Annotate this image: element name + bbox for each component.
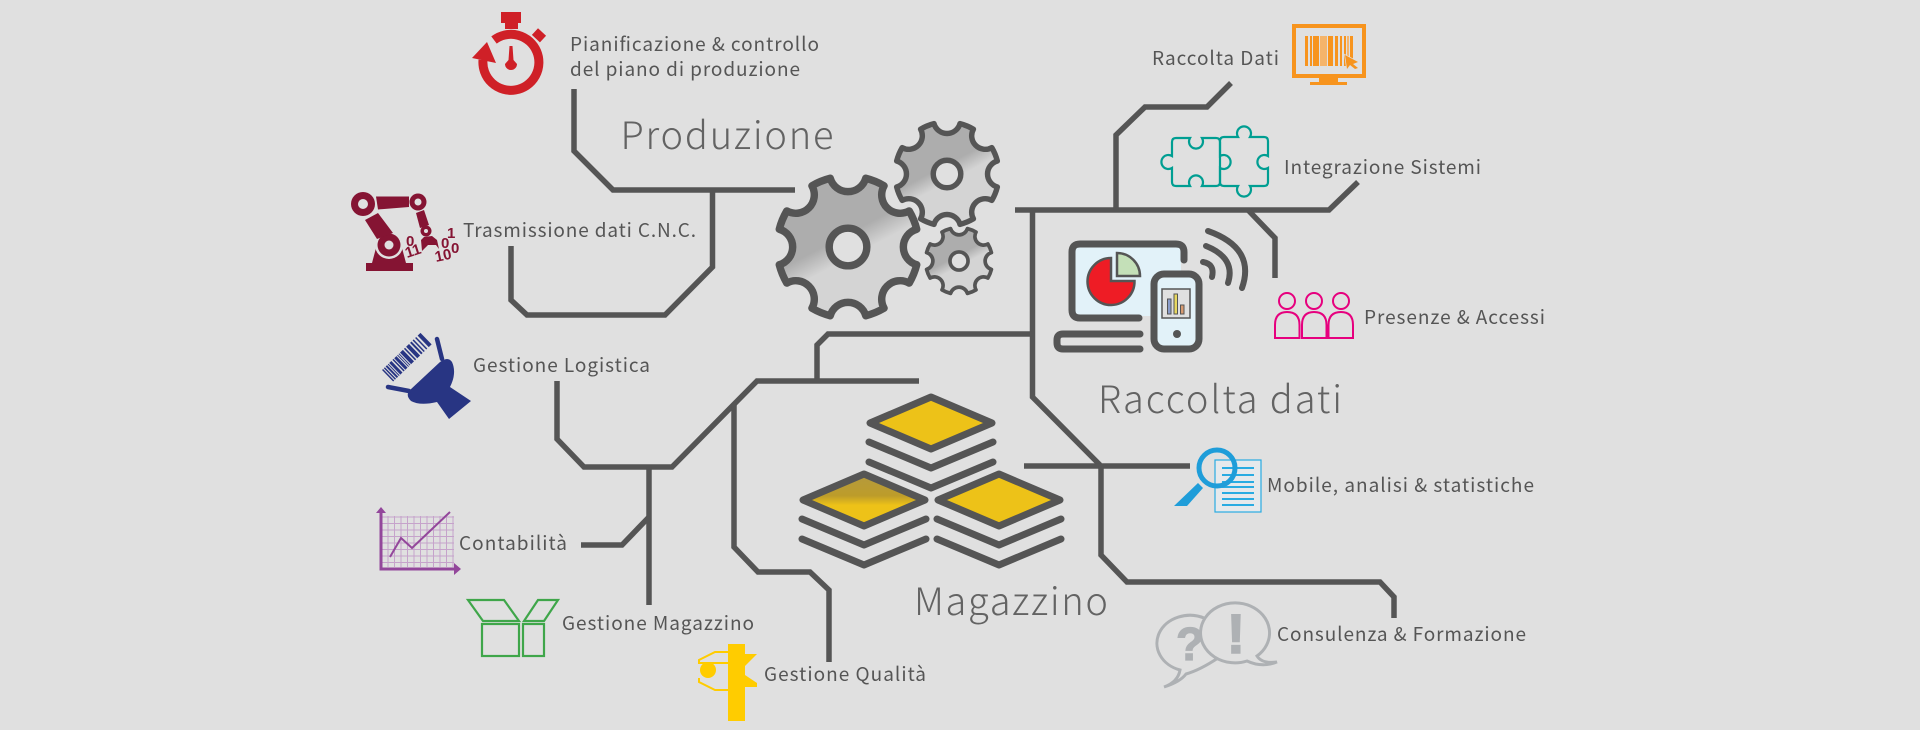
icon: robot arm [351,192,459,271]
icon: small gear [927,229,991,293]
robot data digits: 0 [451,240,459,257]
label: gestione logistica: Gestione Logistica [473,351,650,378]
label: consulenza e formazione: Consulenza & Formazione [1277,620,1526,647]
icon: stopwatch [472,12,546,90]
title: Raccolta dati: Raccolta dati [1098,369,1342,424]
label: piano di produzione: del piano di produzione [570,55,800,82]
icon: speech bubbles: ? [1176,618,1204,670]
label: gestione qualita: Gestione Qualità [764,660,926,687]
title: Magazzino: Magazzino [914,571,1108,626]
scanned barcode [382,333,432,382]
icon: open box [468,600,558,656]
icon: magnifier and document [1174,450,1261,512]
label: trasmissione dati: Trasmissione dati C.N.C. [463,216,696,243]
pie chart [1088,253,1140,305]
icon: large gear [779,178,917,316]
label: integrazione sistemi: Integrazione Sistemi [1284,153,1481,180]
robot data digits: 0 [406,233,414,250]
robot data digits: 1 [447,225,455,242]
icon: people [1275,293,1353,338]
right stack [937,474,1061,565]
robot data digits: 11 [403,241,423,262]
label: raccolta dati: Raccolta Dati [1152,44,1279,71]
phone [1154,274,1199,349]
cursor [1345,55,1358,69]
icon: barcode monitor [1294,26,1364,85]
icon: speech bubbles [1157,602,1277,687]
title: Produzione: Produzione [620,105,834,160]
connector lines: raccolta dati [817,83,1394,618]
label: presenze e accessi: Presenze & Accessi [1364,303,1545,330]
icon: growth chart [376,507,461,575]
robot data digits: 0 [441,235,449,252]
icon: puzzle [1161,126,1268,197]
left stack [802,474,926,565]
icon: barcode scanner [382,333,471,419]
label: contabilita: Contabilità [459,529,567,556]
icon: caliper [699,644,757,721]
wifi waves [1203,231,1245,288]
robot data digits [403,225,459,266]
icon: warehouse stacks [802,397,1061,565]
label: gestione magazzino: Gestione Magazzino [562,609,754,636]
icon: laptop and phone [1057,231,1245,349]
icon: speech bubbles: ! [1227,602,1245,665]
label: mobile analisi statistiche: Mobile, analisi & statistiche [1267,471,1534,498]
connector lines: produzione [511,89,795,315]
top stack [869,397,993,488]
icon: medium gear [897,124,997,224]
connector lines: magazzino [557,381,919,662]
robot data digits: 10 [433,246,453,266]
label: pianificazione: Pianificazione & controllo [570,30,819,57]
